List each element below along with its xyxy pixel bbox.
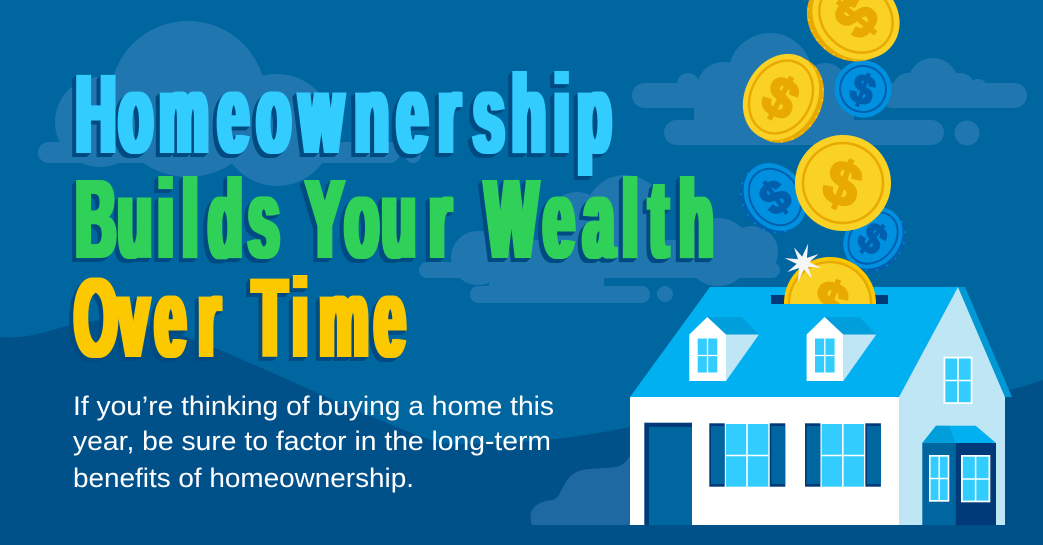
cloud: top left: [38, 21, 421, 186]
title: [74, 53, 713, 380]
coin: blue left: $: [750, 168, 800, 226]
coin: blue right: $: [849, 213, 897, 264]
coin: gold large: [781, 121, 905, 245]
front window right with shutters: [805, 423, 881, 487]
body text: year, be sure to factor in the long-term: [73, 426, 551, 456]
coin: gold left: [728, 40, 839, 156]
side roof edge: [958, 287, 1012, 397]
dormer right: [807, 317, 876, 381]
title line 2: Builds Your Wealth: [76, 158, 713, 281]
house side wall: [899, 287, 1005, 525]
coin: blue small: [826, 52, 900, 126]
coin: blue right: [831, 195, 918, 284]
roof: [630, 287, 958, 397]
dormer left: [689, 317, 759, 381]
sparkle: [778, 238, 828, 288]
coin: blue left: [727, 151, 819, 246]
roof coin slot: [771, 295, 888, 304]
cloud: top right: [632, 33, 1027, 146]
title line 1: Homeownership: [76, 53, 611, 176]
coin: gold entering slot: [784, 257, 876, 304]
garage door: [644, 423, 692, 525]
cloud: middle: [419, 175, 780, 303]
porch: [922, 426, 996, 525]
cloud: bottom: [531, 456, 650, 525]
body text: benefits of homeownership.: [73, 463, 414, 493]
upper gable window: [944, 357, 972, 404]
dark hills: [0, 321, 1043, 545]
front window left with shutters: [709, 423, 785, 487]
coin: gold top: [790, 0, 917, 81]
body text: If you’re thinking of buying a home this: [73, 391, 554, 421]
coin: blue small: $: [844, 64, 882, 115]
coin: gold large: $: [814, 146, 870, 223]
body text: [73, 391, 554, 493]
title line 3: Over Time: [74, 257, 405, 380]
clouds background: [38, 21, 1027, 303]
house front wall: [630, 397, 899, 525]
coin: gold left: $: [752, 62, 809, 133]
coin: gold entering slot: $: [803, 266, 857, 341]
